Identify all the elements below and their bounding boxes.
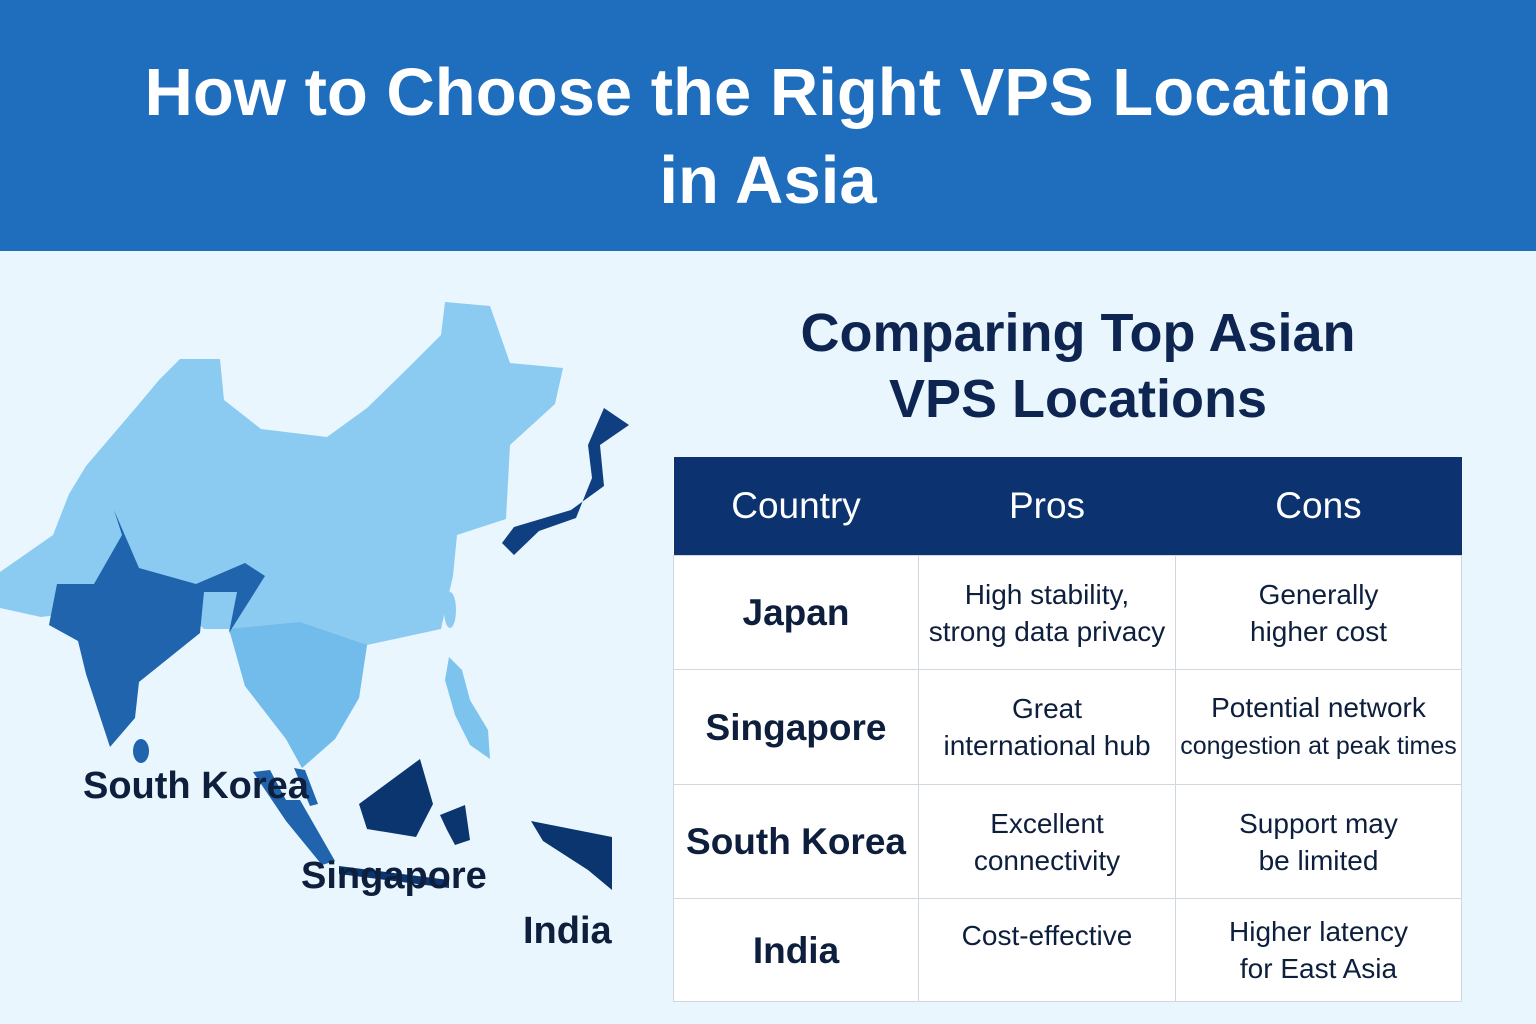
comparison table: Japan [743,592,849,633]
label: Singapore: Singapore [301,855,487,897]
comparison table: Country [731,485,861,526]
comparison table: Great [1012,693,1082,724]
comparison table: strong data privacy [929,616,1165,646]
comparison table: for East Asia [1240,953,1397,984]
comparison table: be limited [1259,844,1378,876]
subtitle [800,303,1356,429]
comparison table: Higher latency [1229,916,1408,947]
comparison table: Cost-effective [962,920,1132,951]
comparison table: Singapore [706,706,886,748]
china region [0,302,563,768]
comparison table: Excellent [990,808,1104,838]
map [0,302,629,890]
comparison table: Potential network [1211,692,1426,723]
southeast asia [229,622,367,768]
comparison table [673,457,1462,1002]
comparison table: Support may [1239,808,1398,838]
comparison table: Pros [1009,485,1085,526]
comparison table: Cons [1275,485,1362,526]
comparison table: congestion at peak times [1180,732,1457,760]
label: South Korea: South Korea [83,765,309,807]
comparison table: India [753,930,839,970]
japan [502,408,629,555]
india [49,510,265,747]
comparison table: South Korea [686,821,906,862]
comparison table: international hub [943,730,1151,761]
title: in Asia [659,143,877,218]
title: How to Choose the Right VPS Location [145,55,1391,130]
comparison table: connectivity [974,844,1120,876]
label: India: India [523,910,612,952]
comparison table: High stability, [965,578,1129,610]
indonesia [253,759,612,890]
comparison table: Generally [1259,578,1378,610]
comparison table: higher cost [1250,616,1387,646]
subtitle: Comparing Top Asian [800,303,1356,363]
subtitle: VPS Locations [889,369,1267,429]
title [0,0,1536,251]
